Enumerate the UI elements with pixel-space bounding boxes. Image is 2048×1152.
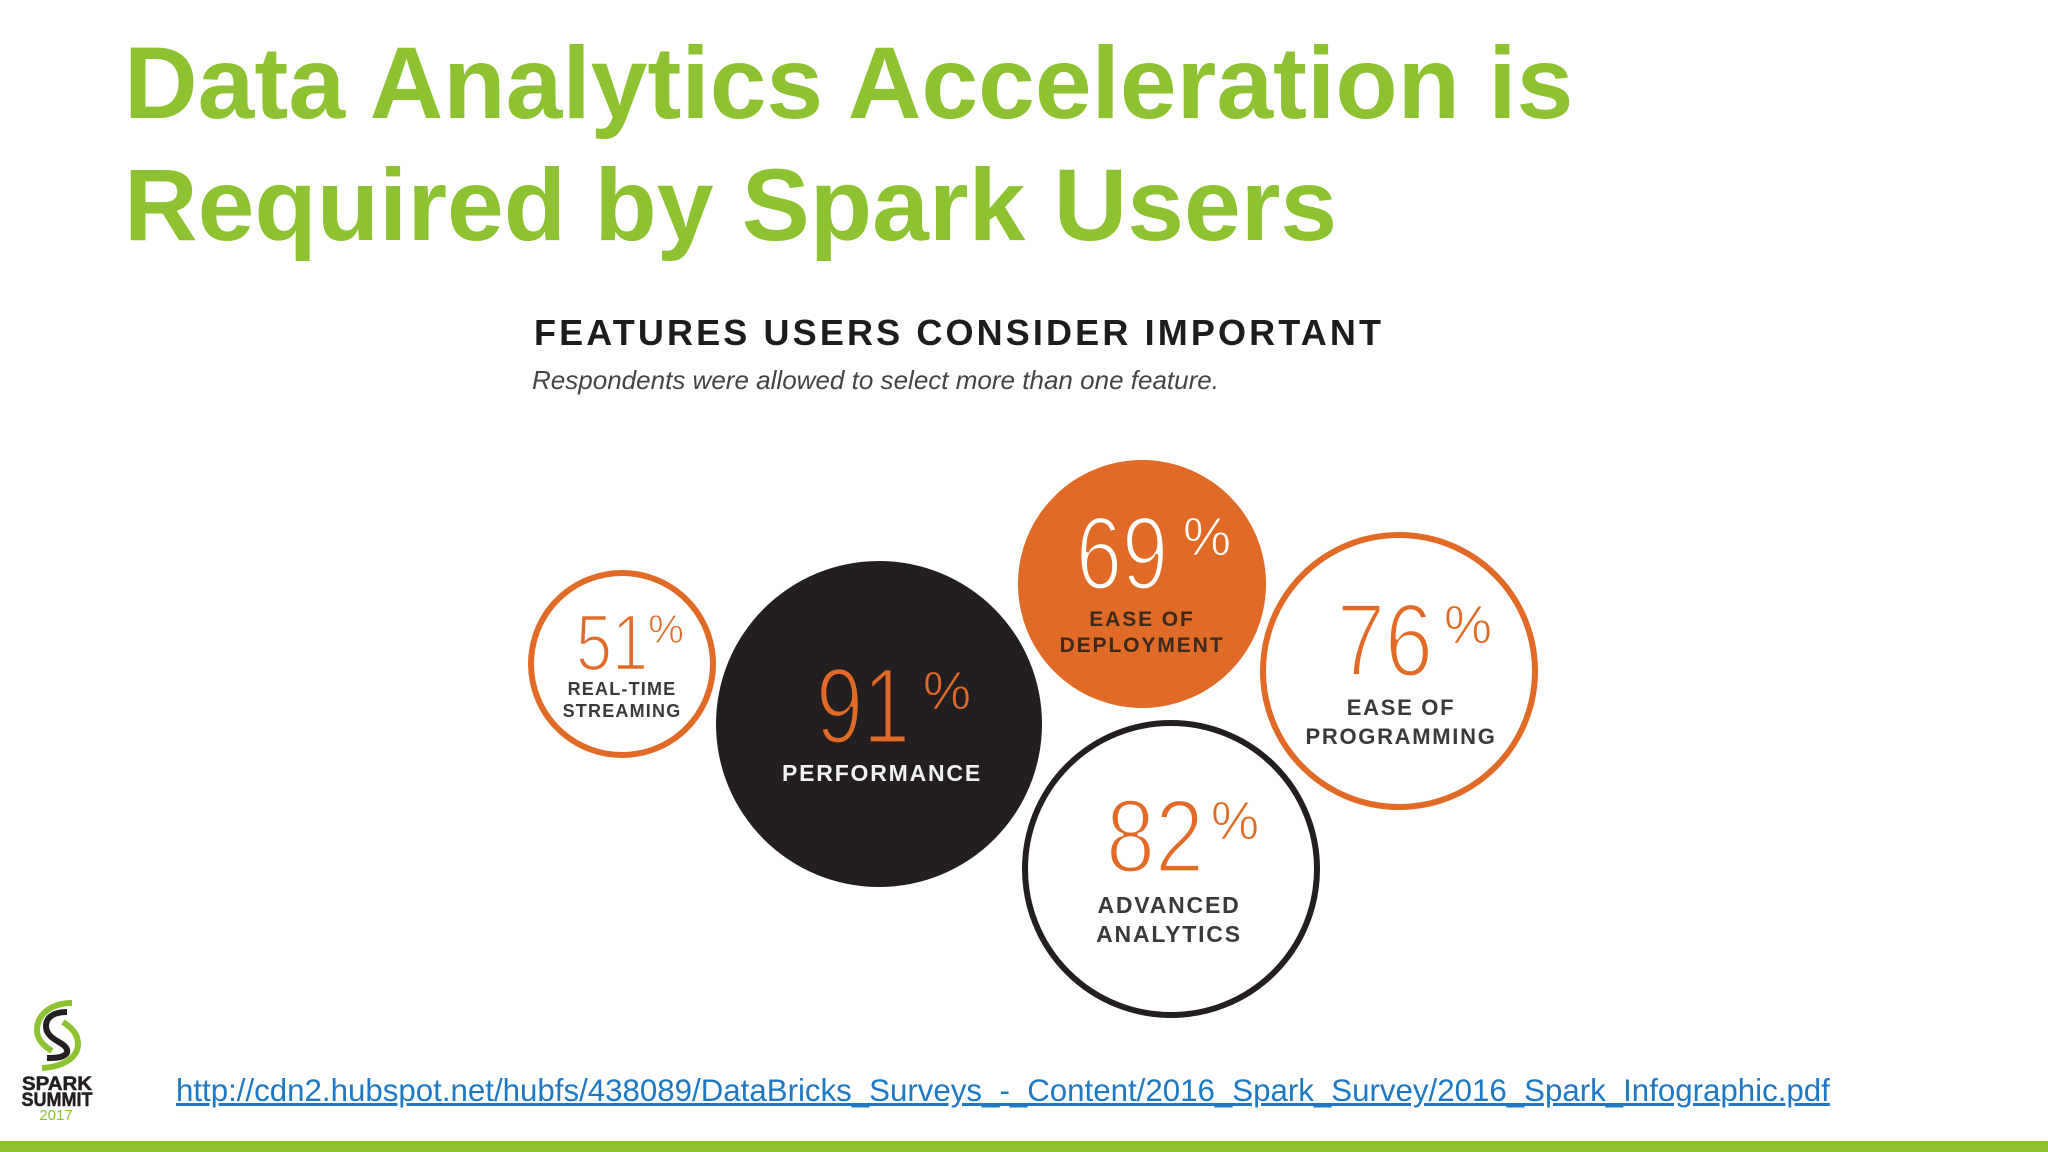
bubble: ease of deployment 69%: EASE OF bbox=[1089, 608, 1195, 631]
bubble: ease of deployment 69%: 69 bbox=[1076, 496, 1168, 612]
bubble: real-time streaming 51%: 51 bbox=[576, 598, 648, 687]
bubble: performance 91%: % bbox=[923, 661, 971, 721]
bubble: ease of deployment 69%: % bbox=[1183, 507, 1231, 567]
chart subtitle: Respondents were allowed to select more than one feature. bbox=[532, 365, 1219, 395]
footer bar bbox=[0, 1141, 2048, 1152]
title: Required by Spark Users bbox=[124, 148, 1337, 262]
chart heading: FEATURES USERS CONSIDER IMPORTANT bbox=[534, 312, 1381, 353]
title bbox=[124, 26, 1573, 262]
bubble: real-time streaming 51%: % bbox=[648, 608, 684, 652]
bubble: ease of deployment 69%: DEPLOYMENT bbox=[1060, 634, 1224, 657]
bubble: ease of programming 76%: PROGRAMMING bbox=[1305, 724, 1497, 749]
bubble: advanced analytics 82%: % bbox=[1211, 791, 1259, 851]
bubble: ease of deployment 69% bbox=[1018, 460, 1266, 708]
icon: spark summit logo bbox=[22, 1003, 93, 1124]
title: Data Analytics Acceleration is bbox=[124, 26, 1573, 140]
bubble: ease of programming 76%: EASE OF bbox=[1347, 695, 1455, 720]
bubble: performance 91%: 91 bbox=[816, 645, 910, 766]
bubble: performance 91%: PERFORMANCE bbox=[782, 760, 982, 786]
icon: spark summit logo: 2017 bbox=[39, 1107, 73, 1124]
bubble: advanced analytics 82%: ANALYTICS bbox=[1096, 921, 1242, 947]
bubble: advanced analytics 82%: ADVANCED bbox=[1097, 892, 1241, 918]
bubble: real-time streaming 51%: STREAMING bbox=[563, 701, 681, 721]
bubble: advanced analytics 82%: 82 bbox=[1106, 779, 1204, 895]
bubble: ease of programming 76% bbox=[1263, 535, 1535, 807]
bubble: real-time streaming 51%: REAL-TIME bbox=[568, 679, 676, 699]
icon: spark summit logo: SPARK bbox=[22, 1074, 92, 1095]
icon: spark summit logo: SUMMIT bbox=[22, 1090, 93, 1111]
bubble: performance 91% bbox=[716, 561, 1042, 887]
source link: http://cdn2.hubspot.net/hubfs/438089/DataBricks_Surveys_-_Content/2016_Spark_Survey/2016_Spark_Infographic.pdf bbox=[176, 1073, 1830, 1108]
bubble: real-time streaming 51% bbox=[531, 573, 713, 755]
bubble: ease of programming 76%: 76 bbox=[1337, 583, 1433, 699]
bubble: ease of programming 76%: % bbox=[1444, 595, 1492, 655]
bubble: advanced analytics 82% bbox=[1025, 723, 1317, 1015]
